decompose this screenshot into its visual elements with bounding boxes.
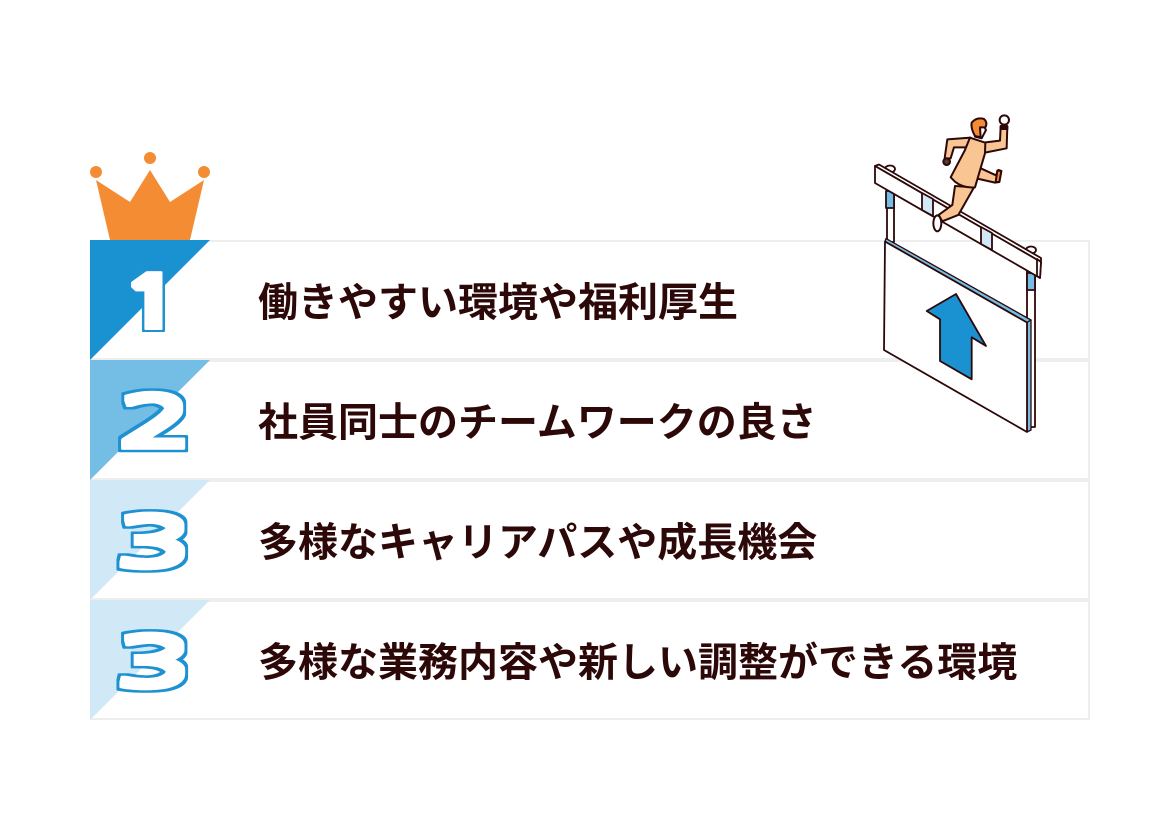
sign board [884, 238, 1031, 432]
label 1: 働きやすい環境や福利厚生 [258, 281, 738, 325]
ranking row 1 [90, 240, 1090, 360]
ranking row 3 [90, 480, 1090, 600]
rank badge 3 [90, 480, 210, 600]
runner figure [933, 115, 1009, 231]
ranking row 2 [90, 360, 1090, 480]
rank badge 3 (tie) [90, 600, 210, 720]
label 4: 多様な業務内容や新しい調整ができる環境 [258, 641, 1017, 685]
icon: crown [90, 152, 210, 240]
rank badge 3 (tie): 3 [113, 629, 195, 697]
rank badge 3: 3 [113, 509, 195, 577]
hurdle beam [875, 164, 1041, 278]
illustration: person jumping a hurdle over an up arrow sign [874, 114, 1042, 433]
hurdle posts and knobs [885, 166, 1036, 427]
rank badge 1 [90, 240, 210, 360]
ranking row 4 [90, 600, 1090, 720]
label 2: 社員同士のチームワークの良さ [258, 401, 817, 445]
rank badge 1: 1 [123, 269, 180, 339]
label 3: 多様なキャリアパスや成長機会 [258, 521, 817, 565]
rank badge 2: 2 [115, 388, 196, 458]
icon: up arrow [927, 294, 986, 379]
rank badge 2 [90, 360, 210, 480]
